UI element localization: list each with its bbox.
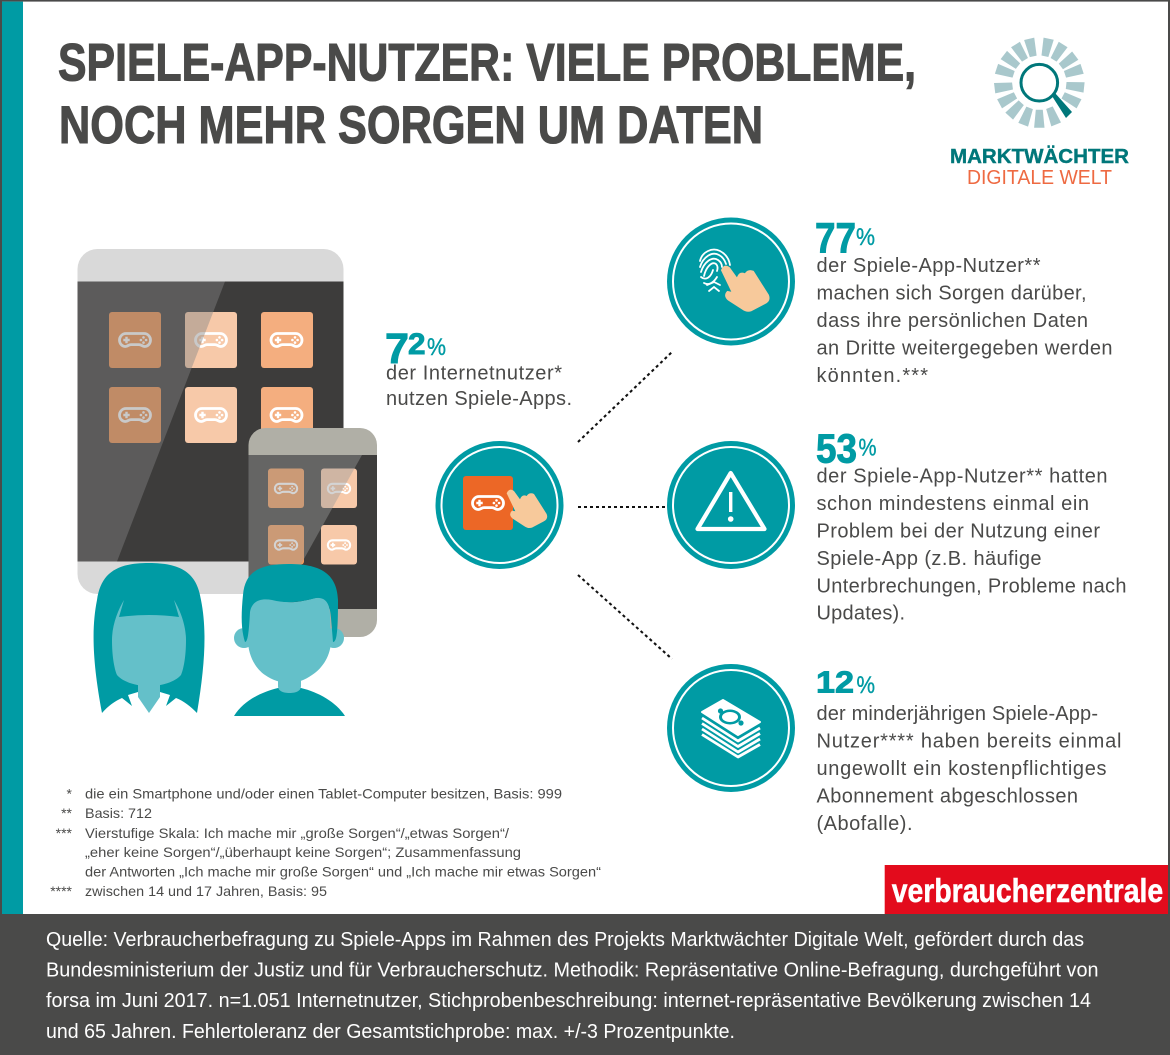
footnotes: der Antworten „Ich mache mir große Sorgen“ und „Ich mache mir etwas Sorgen“ xyxy=(85,864,601,880)
stat: 53% xyxy=(816,426,1126,625)
icon: magnifier with rays xyxy=(994,38,1085,128)
footnotes: * xyxy=(67,785,73,801)
title xyxy=(58,34,916,155)
logo: Marktwächter Digitale Welt: MARKTWÄCHTER xyxy=(950,145,1129,168)
stat: 12% xyxy=(816,665,1122,835)
stat: 53%: Updates). xyxy=(816,603,905,625)
stat: 53%: % xyxy=(858,435,876,462)
stat: 12%: Nutzer**** haben bereits einmal xyxy=(816,731,1122,753)
stat: 53%: 53 xyxy=(816,426,857,472)
stat: 53%: Problem bei der Nutzung einer xyxy=(816,520,1100,542)
stat: 72%: 7 xyxy=(385,325,409,373)
stat: 77%: der Spiele-App-Nutzer** xyxy=(816,255,1041,277)
stat: 53%: Spiele-App (z.B. häufige xyxy=(816,548,1042,570)
icon: warning triangle xyxy=(667,441,795,569)
stat: 72%: % xyxy=(427,334,446,361)
stat: 53%: schon mindestens einmal ein xyxy=(816,493,1089,515)
woman xyxy=(94,563,204,713)
footnotes xyxy=(50,785,601,899)
stat: 77% xyxy=(815,215,1112,387)
stat: 77%: dass ihre persönlichen Daten xyxy=(816,310,1088,332)
stat: 12%: ungewollt ein kostenpflichtiges xyxy=(816,758,1106,780)
stat: 77%: % xyxy=(856,224,875,251)
footnotes: zwischen 14 und 17 Jahren, Basis: 95 xyxy=(85,883,327,899)
stat: 12%: der minderjährigen Spiele-App- xyxy=(816,703,1098,725)
stat: 12%: % xyxy=(856,672,875,699)
icon: fingerprint and hand xyxy=(667,218,795,346)
icon: game app tapped by hand xyxy=(436,441,564,569)
footnotes: *** xyxy=(56,825,73,841)
footnotes: Vierstufige Skala: Ich mache mir „große Sorgen“/„etwas Sorgen“/ xyxy=(85,825,509,841)
footnotes: die ein Smartphone und/oder einen Tablet-Computer besitzen, Basis: 999 xyxy=(85,785,562,801)
stat: 72%: nutzen Spiele-Apps. xyxy=(386,388,572,410)
stat: 72%: der Internetnutzer* xyxy=(386,362,562,384)
man xyxy=(234,564,345,716)
stat: 53%: der Spiele-App-Nutzer** hatten xyxy=(816,465,1108,487)
title: SPIELE-APP-NUTZER: VIELE PROBLEME, xyxy=(58,34,916,92)
stat: 72%: 2 xyxy=(408,328,426,361)
tablet xyxy=(78,249,344,594)
stat: 77%: 77 xyxy=(815,215,856,263)
source panel xyxy=(0,914,1170,1055)
stat: 12%: Abonnement abgeschlossen xyxy=(816,786,1078,808)
teal side bar xyxy=(2,2,23,915)
stat: 77%: könnten.*** xyxy=(816,365,928,387)
source panel: forsa im Juni 2017. n=1.051 Internetnutzer, Stichprobenbeschreibung: internet-repräsentative Bevölkerung zwischen 14 xyxy=(46,990,1091,1012)
stat: 77%: machen sich Sorgen darüber, xyxy=(816,282,1086,304)
stat: 12%: (Abofalle). xyxy=(816,813,912,835)
logo: Marktwächter Digitale Welt xyxy=(950,38,1129,189)
stat: 12%: 12 xyxy=(816,665,854,700)
logo: Marktwächter Digitale Welt: DIGITALE WELT xyxy=(967,167,1112,189)
footnotes: **** xyxy=(50,883,73,899)
source panel: Bundesministerium der Justiz und für Verbraucherschutz. Methodik: Repräsentative Online-Befragung, durchgeführt von xyxy=(46,960,1098,982)
footnotes: ** xyxy=(61,805,73,821)
stat: 77%: an Dritte weitergegeben werden xyxy=(816,337,1112,359)
icon: stack of money xyxy=(667,664,795,792)
footnotes: Basis: 712 xyxy=(85,805,152,821)
stat: 72% xyxy=(385,325,572,410)
stat: 53%: Unterbrechungen, Probleme nach xyxy=(816,575,1126,597)
smartphone xyxy=(248,428,377,637)
connector lines xyxy=(578,352,672,659)
footnotes: „eher keine Sorgen“/„überhaupt keine Sorgen“; Zusammenfassung xyxy=(85,844,521,860)
title: NOCH MEHR SORGEN UM DATEN xyxy=(59,96,763,155)
source panel: Quelle: Verbraucherbefragung zu Spiele-Apps im Rahmen des Projekts Marktwächter Digitale Welt, gefördert durch das xyxy=(46,929,1084,951)
illustration: devices and users xyxy=(78,249,377,716)
source panel: und 65 Jahren. Fehlertoleranz der Gesamtstichprobe: max. +/-3 Prozentpunkte. xyxy=(46,1021,735,1043)
